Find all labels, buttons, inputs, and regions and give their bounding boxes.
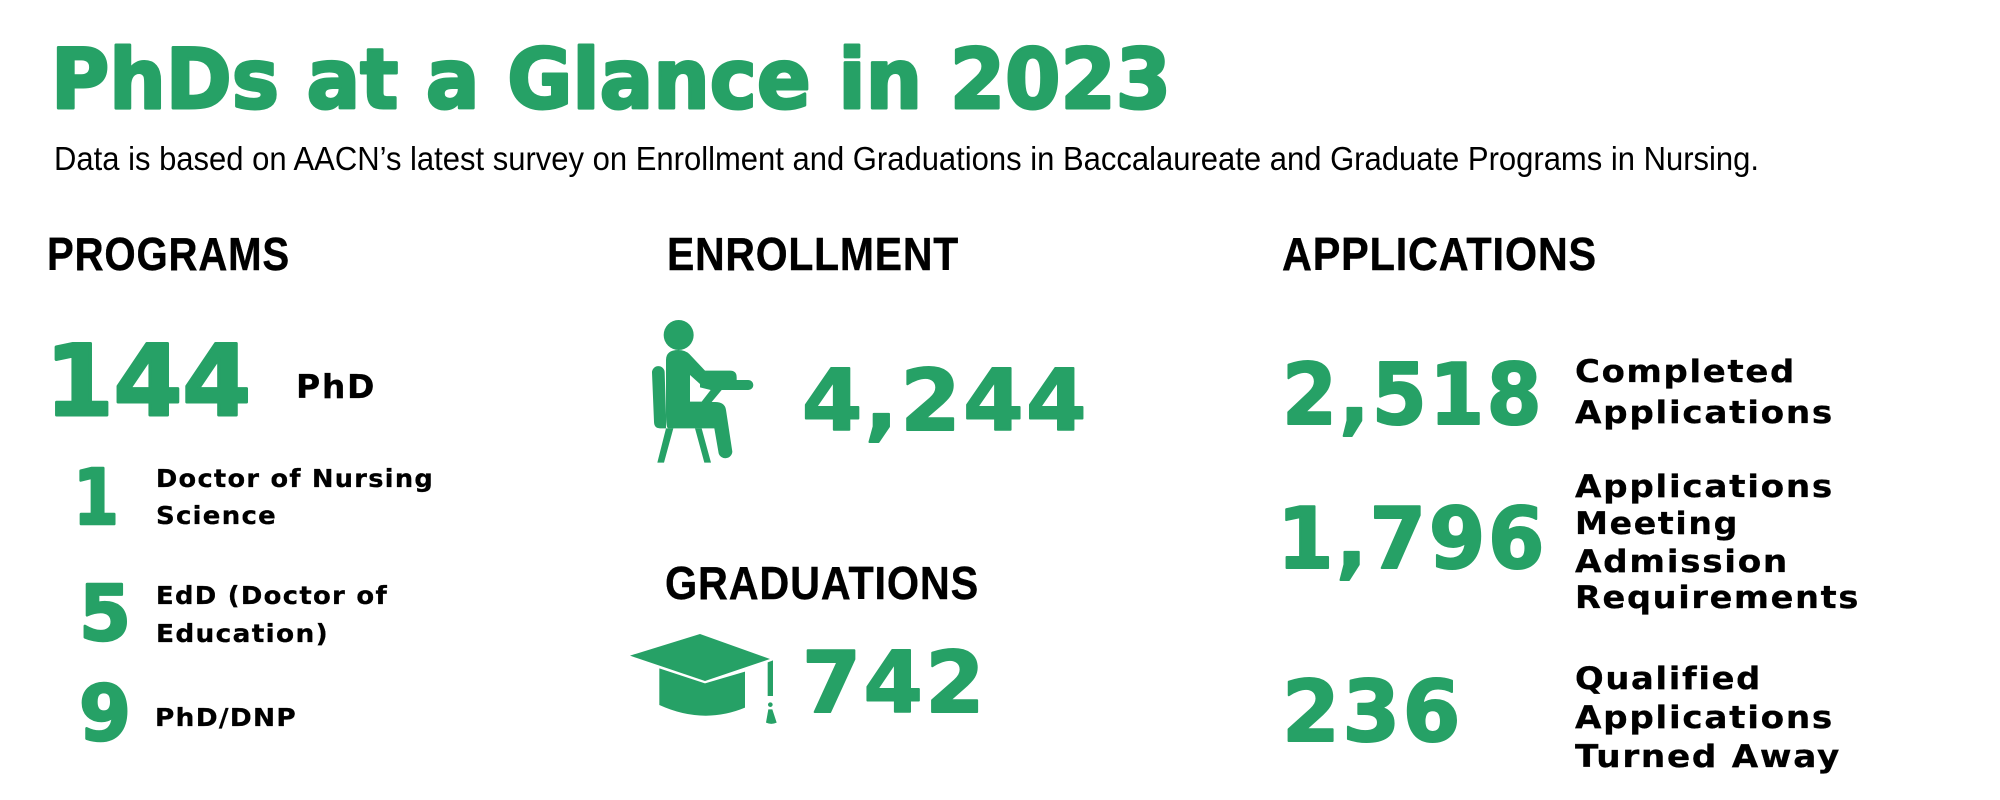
- stat: 1,796 applications meeting admission requirements: [1277, 469, 1860, 616]
- heading: graduations: GRADUATIONS: [665, 557, 979, 609]
- stat: 236 qualified applications turned away: [1282, 661, 1841, 775]
- panel: enrollment: [652, 228, 1089, 463]
- stat: 144 PhD: PhD: [296, 367, 376, 406]
- stat: 144 PhD: 144: [45, 325, 251, 439]
- stat: 5 EdD: Education): [156, 619, 329, 648]
- stat: 2,518 completed applications: Completed: [1575, 354, 1796, 390]
- stat: 1,796 applications meeting admission requirements: Requirements: [1575, 580, 1860, 616]
- stat: 1 Doctor of Nursing Science: [73, 454, 434, 543]
- stat: 5 EdD: 5: [79, 570, 131, 659]
- icon: graduation cap: [630, 634, 777, 724]
- subtitle: Data is based on AACN’s latest survey on Enrollment and Graduations in Baccalaureate and Graduate Programs in Nursing.: [54, 140, 1759, 177]
- stat: 5 EdD: EdD (Doctor of: [156, 581, 388, 610]
- stat: 1 Doctor of Nursing Science: Doctor of Nursing: [156, 464, 434, 493]
- stat: 1,796 applications meeting admission requirements: 1,796: [1277, 490, 1547, 589]
- stat: 1 Doctor of Nursing Science: 1: [73, 454, 119, 543]
- stat: 1,796 applications meeting admission requirements: Meeting: [1575, 506, 1739, 542]
- stat: 1,796 applications meeting admission requirements: Applications: [1575, 469, 1834, 505]
- stat: 236 qualified applications turned away: 236: [1282, 663, 1463, 762]
- stat: 4,244: 4,244: [802, 352, 1089, 451]
- stat: 2,518 completed applications: 2,518: [1282, 346, 1544, 445]
- panel: applications: [1277, 228, 1860, 775]
- stat: 742: 742: [802, 634, 987, 733]
- stat: 1,796 applications meeting admission requirements: Admission: [1575, 544, 1789, 580]
- stat: 9 PhD/DNP: 9: [79, 670, 131, 759]
- panel: programs: [45, 228, 434, 759]
- stat: 236 qualified applications turned away: Turned Away: [1575, 739, 1841, 775]
- stat: 1 Doctor of Nursing Science: Science: [156, 501, 277, 530]
- stat: 9 PhD/DNP: [79, 670, 297, 759]
- heading: applications: APPLICATIONS: [1282, 228, 1597, 280]
- stat: 236 qualified applications turned away: Applications: [1575, 700, 1834, 736]
- stat: 2,518 completed applications: [1282, 346, 1834, 445]
- title: PhDs at a Glance in 2023: [51, 31, 1171, 128]
- stat: 2,518 completed applications: Applications: [1575, 395, 1834, 431]
- stat: 236 qualified applications turned away: Qualified: [1575, 661, 1762, 697]
- stat: 5 EdD: [79, 570, 388, 659]
- panel: graduations: [630, 557, 987, 733]
- icon: seated student: [652, 320, 753, 463]
- heading: enrollment: ENROLLMENT: [667, 228, 959, 280]
- stat: 144 PhD: [45, 325, 376, 439]
- heading: programs: PROGRAMS: [47, 228, 290, 280]
- stat: 9 PhD/DNP: PhD/DNP: [155, 703, 297, 732]
